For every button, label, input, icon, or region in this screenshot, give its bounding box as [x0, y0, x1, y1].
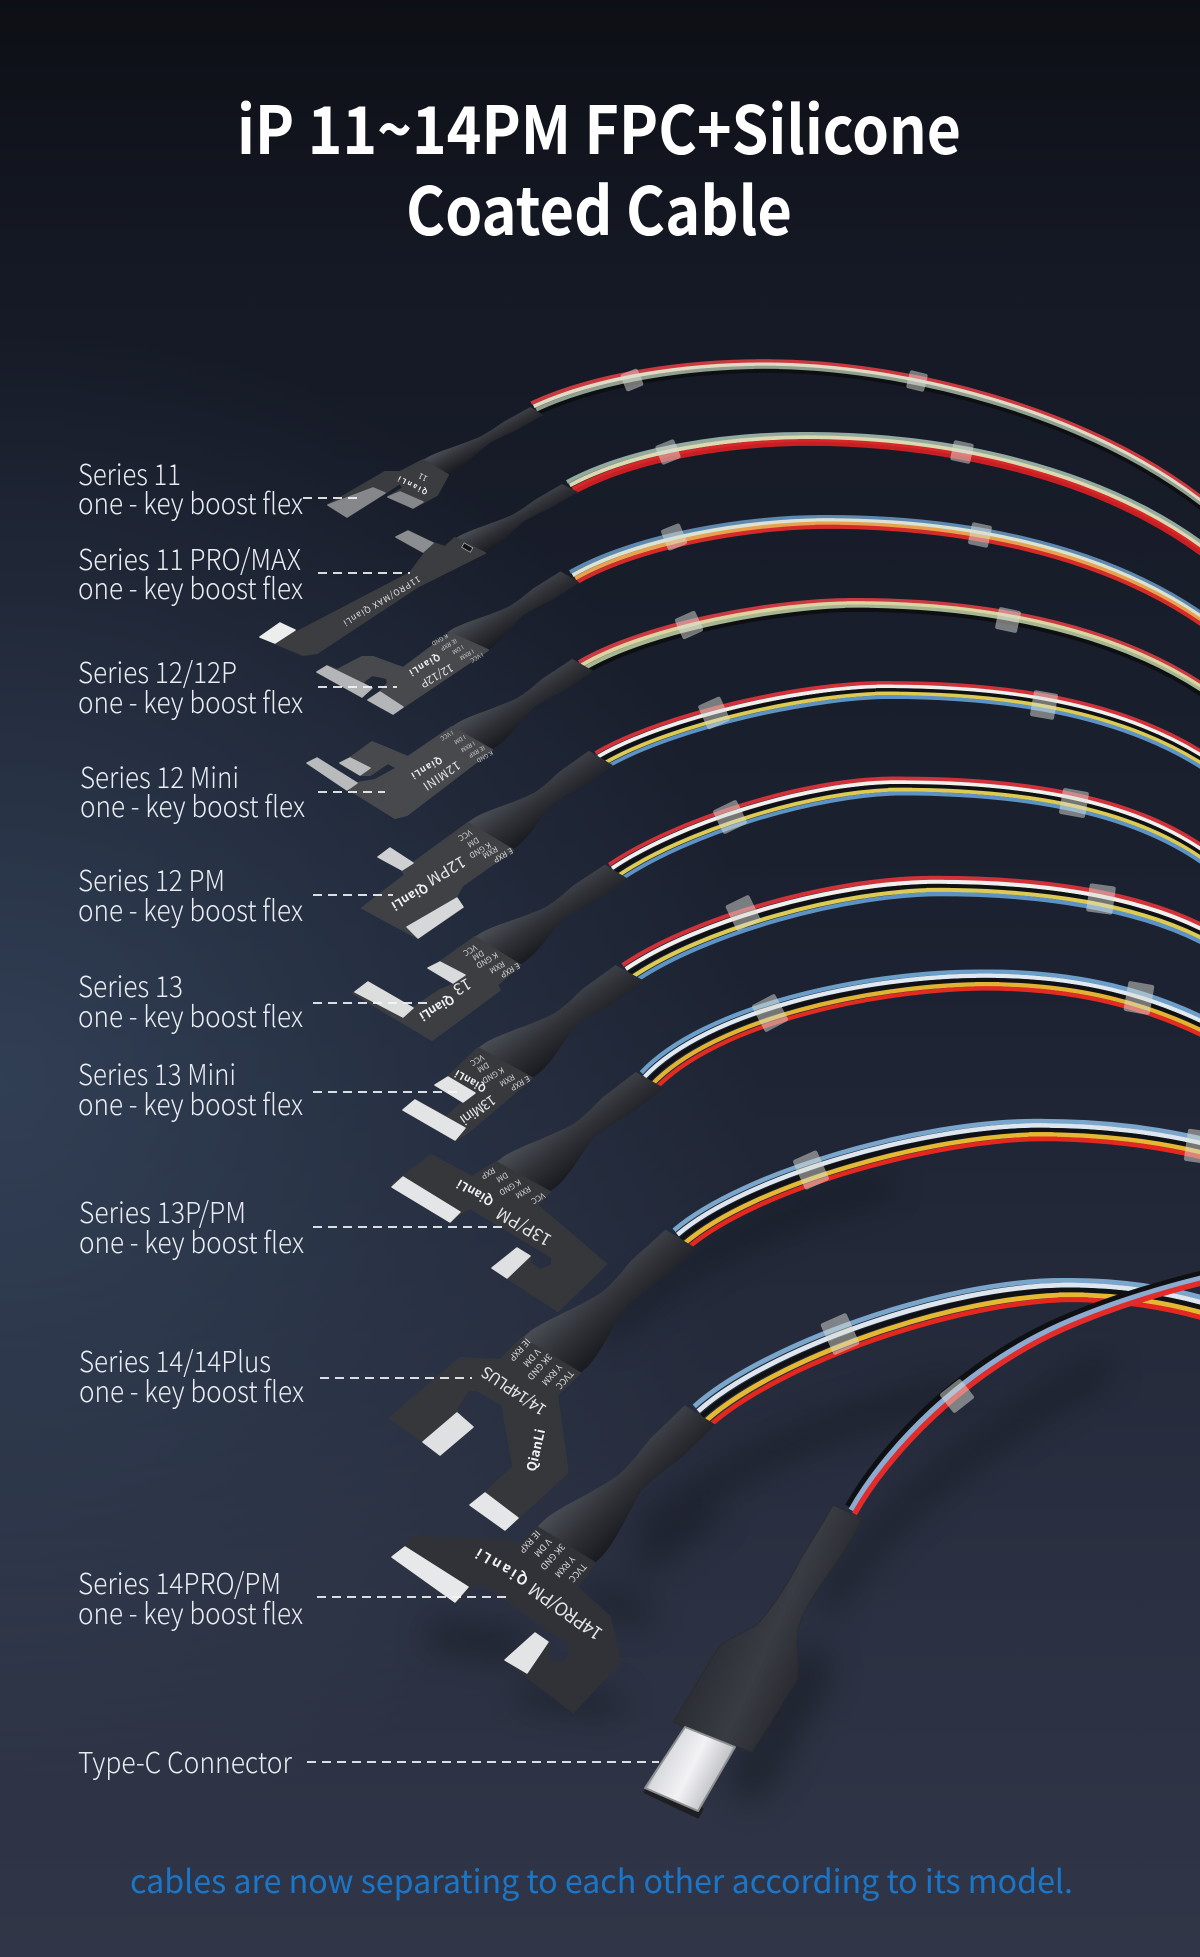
label: Series 12 Mini [80, 755, 305, 826]
label: Series 11 PRO/MAX: one - key boost flex [78, 566, 303, 608]
flex: Series 13 Mini: DM [475, 1059, 491, 1075]
flex: Series 12/12P: QianLi [407, 651, 443, 679]
cable: Series 12 Mini [452, 600, 1200, 750]
flex: Series 13 Mini: E RXP [508, 1073, 532, 1093]
cable: Series 13P/PM [496, 972, 1200, 1192]
flex: Series 13P/PM: DM [494, 1169, 510, 1185]
flex: Series 14PRO/PM: QianLi [472, 1543, 532, 1591]
label: Series 13P/PM: Series 13P/PM [79, 1190, 246, 1232]
label: Series 13: one - key boost flex [78, 994, 303, 1036]
label: Series 12 Mini: Series 12 Mini [80, 755, 239, 797]
flex: Series 13P/PM [391, 1155, 606, 1311]
label: Series 14/14Plus: Series 14/14Plus [79, 1339, 271, 1381]
flex: Series 14/14Plus [390, 1336, 580, 1530]
label: Series 13 Mini: Series 13 Mini [78, 1052, 236, 1094]
flex: Series 14/14Plus: TVCC [553, 1368, 577, 1393]
cable: Series 13 [474, 779, 1200, 965]
flex: Series 13: K GND [474, 949, 500, 971]
flex: Series 12 Mini: IE RXP [467, 744, 487, 760]
cast shadows on the mat [440, 1185, 1100, 1780]
label: Series 13 Mini: one - key boost flex [78, 1082, 303, 1124]
label: Series 11: one - key boost flex [78, 481, 303, 523]
flex: Series 11 PRO/MAX [260, 531, 485, 655]
label: Series 14PRO/PM [78, 1561, 303, 1633]
cable: Series 11 [424, 361, 1200, 515]
flex: Series 12 PM: RXM [480, 843, 500, 861]
flex: Series 13 Mini: 13Mini [456, 1090, 500, 1130]
label: Series 14/14Plus: one - key boost flex [79, 1369, 304, 1411]
flex: Series 14PRO/PM: 14PRO/PM [523, 1577, 607, 1647]
label: Series 13 [78, 964, 303, 1036]
flex: Series 11: 11 [417, 470, 429, 484]
flex: Series 14PRO/PM: 3K GND [538, 1541, 568, 1573]
flex: Series 14/14Plus: Y RXM [539, 1361, 566, 1389]
flex: Series 12/12P: I DM [450, 643, 465, 657]
flex: Series 13P/PM: VCC [529, 1190, 547, 1206]
flex: Series 14/14Plus: 14/14PLUS [476, 1361, 550, 1423]
flex: Series 14/14Plus: V DM [520, 1346, 544, 1370]
title: Coated Cable [406, 159, 792, 255]
flex: Series 12 PM: QianLi [388, 880, 432, 914]
flex: Series 12 PM: K GND [467, 839, 493, 861]
flex: Series 14PRO/PM: Y RXM [552, 1553, 579, 1581]
flex: Series 13: DM [470, 947, 486, 963]
Type-C cable and connector [645, 1272, 1200, 1817]
flex: Series 12 Mini: QianLi [409, 754, 445, 782]
cable: Series 14/14Plus [522, 1121, 1200, 1374]
flex: Series 13P/PM: K GND [497, 1176, 523, 1198]
flex: Series 12 PM: DM [465, 834, 481, 850]
label: Series 11 PRO/MAX [78, 537, 303, 608]
flex: Series 11 PRO/MAX: 11PRO/MAX QianLi [341, 573, 423, 629]
label: Series 11: Series 11 [78, 452, 181, 494]
flex: Series 12 Mini: I DM [452, 733, 467, 747]
label: Type-C Connector: Type-C Connector [78, 1740, 293, 1782]
flex: Series 12 PM [362, 823, 515, 938]
flex: Series 13: VCC [461, 942, 479, 958]
label: Series 14PRO/PM: one - key boost flex [78, 1591, 303, 1633]
flex: Series 13: RXM [487, 958, 507, 976]
flex: Series 13 Mini: K GND [480, 1064, 506, 1086]
flex: Series 11 [328, 460, 448, 517]
cable: Series 11 PRO/MAX [455, 434, 1200, 560]
label: Series 12 Mini: one - key boost flex [80, 784, 305, 826]
flex: Series 13 Mini: RXM [497, 1071, 517, 1089]
label: Series 11 [78, 452, 303, 523]
flex: Series 13 Mini: QianLi [452, 1067, 488, 1097]
flex: Series 14PRO/PM: IE RXP [516, 1528, 544, 1556]
flex: Series 12 Mini: K GND [475, 749, 495, 765]
label: Series 12/12P [78, 650, 303, 722]
label: Series 14PRO/PM: Series 14PRO/PM [78, 1561, 281, 1603]
label: Series 12/12P: one - key boost flex [78, 680, 303, 722]
label: Series 12 PM: one - key boost flex [78, 888, 303, 930]
cable: Series 12/12P [447, 517, 1200, 654]
title [237, 78, 961, 255]
label: Series 14/14Plus [79, 1339, 304, 1411]
flex: Series 12 PM: VCC [456, 827, 474, 843]
flex: Series 13P/PM: RXP [479, 1165, 497, 1181]
flex: Series 12/12P [317, 632, 488, 714]
flex: Series 12 Mini: 12MINI [420, 757, 464, 795]
flex: Series 12 PM: 12PM [423, 851, 471, 893]
flex: Series 11: QianLi [396, 473, 430, 497]
flex: Series 12 Mini [307, 727, 495, 818]
label: Series 13: Series 13 [78, 964, 183, 1006]
flex: Series 12 Mini: I VCC [439, 729, 455, 743]
flex: Series 14PRO/PM: TVCC [566, 1561, 590, 1586]
cable: Series 14PRO/PM [537, 1280, 1200, 1563]
label: Series 11 PRO/MAX: Series 11 PRO/MAX [78, 537, 301, 579]
flex: Series 13P/PM: RXM [513, 1183, 533, 1201]
flex: Series 12 Mini: I RXM [459, 739, 477, 755]
flex: Series 14/14Plus: QianLi [521, 1427, 549, 1473]
bottom note: cables are now separating to each other according to its model. [130, 1857, 1073, 1903]
flex: Series 14/14Plus: IE RXP [506, 1336, 534, 1364]
label: Series 13 Mini [78, 1052, 303, 1124]
cable: Series 13 Mini [478, 878, 1200, 1078]
flex: Series 13 [353, 937, 522, 1040]
flex: Series 12/12P: I RXM [458, 647, 476, 663]
leader lines [303, 498, 659, 1762]
flex: Series 13P/PM: 13P/PM [491, 1202, 555, 1254]
flex: Series 13: QianLi [416, 991, 458, 1025]
cable: Series 12 PM [468, 683, 1200, 850]
flex: Series 12/12P: I VCC [469, 651, 485, 665]
flex: Series 12/12P: K GND [430, 632, 450, 648]
title: iP 11~14PM FPC+Silicone [237, 78, 961, 174]
label: Series 12/12P: Series 12/12P [78, 650, 237, 692]
flex: Series 13 Mini [403, 1048, 532, 1140]
flex: Series 13: E RXP [498, 960, 522, 980]
flex: Series 12/12P: IE RXP [439, 637, 459, 653]
label: Series 13P/PM [79, 1190, 304, 1262]
flex: Series 12/12P: 12/12P [417, 660, 457, 692]
flex: Series 14PRO/PM: V DM [531, 1536, 555, 1560]
flex: Series 14PRO/PM [392, 1527, 620, 1712]
label: Series 12 PM [78, 858, 303, 930]
flex: Series 12 PM: E RXP [491, 845, 515, 865]
flex: Series 13 Mini: VCC [468, 1052, 486, 1068]
label: Series 12 PM: Series 12 PM [78, 858, 225, 900]
flex: Series 13: 13 [449, 973, 477, 1003]
label: Series 13P/PM: one - key boost flex [79, 1220, 304, 1262]
flex: Series 13P/PM: QianLi [453, 1176, 497, 1210]
flex: Series 14/14Plus: 3K GND [525, 1351, 555, 1383]
